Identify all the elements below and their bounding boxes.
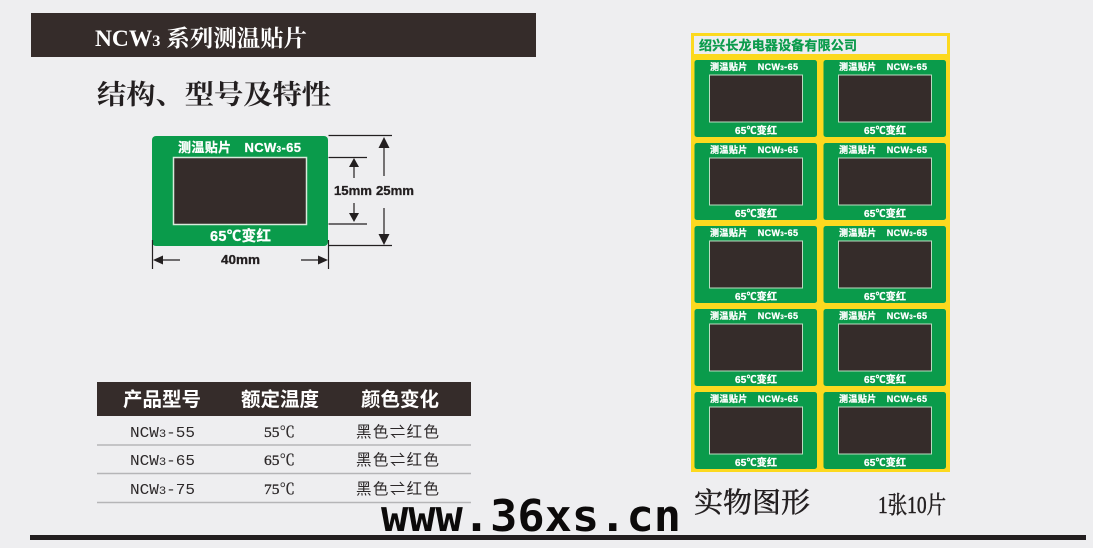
sticker 10: 65℃变红 — [864, 456, 906, 469]
row NCW3-75 — [130, 480, 439, 499]
sticker 5: 测温贴片 NCW3-65 — [710, 227, 798, 238]
company name box: 绍兴长龙电器设备有限公司 — [699, 38, 857, 53]
caption: actual product: 实物图形 — [694, 487, 810, 519]
section heading: 结构、型号及特性 — [97, 79, 331, 110]
table header: 产品型号 — [123, 389, 201, 411]
sticker body — [152, 136, 328, 246]
row NCW3-65 — [130, 451, 439, 470]
row NCW3-65: 黑色⇌红色 — [356, 451, 439, 469]
sticker 10 — [824, 392, 946, 469]
bottom rule — [30, 535, 1086, 540]
sticker 1: 测温贴片 NCW3-65 — [710, 61, 798, 72]
row NCW3-75: 75℃ — [264, 482, 295, 498]
sticker 7: 测温贴片 NCW3-65 — [710, 310, 798, 321]
sticker 2: 65℃变红 — [864, 124, 906, 137]
sticker 6: 测温贴片 NCW3-65 — [839, 227, 927, 238]
dimension label: 40mm: 40mm — [221, 253, 260, 267]
sticker 8 — [824, 309, 946, 386]
table header: 颜色变化 — [361, 388, 439, 411]
table header: 额定温度 — [241, 388, 319, 411]
sticker 7: 65℃变红 — [735, 373, 777, 386]
sticker 6 — [824, 226, 946, 303]
sticker 9: 测温贴片 NCW3-65 — [710, 393, 798, 404]
row NCW3-55: 黑色⇌红色 — [356, 423, 439, 441]
sticker 2: 测温贴片 NCW3-65 — [839, 61, 927, 72]
sticker 10: 测温贴片 NCW3-65 — [839, 393, 927, 404]
row NCW3-55: NCW3-55 — [130, 426, 195, 442]
sticker 8: 测温贴片 NCW3-65 — [839, 310, 927, 321]
product sheet panel — [691, 33, 950, 472]
sticker 3: 测温贴片 NCW3-65 — [710, 144, 798, 155]
header banner — [31, 13, 536, 57]
sticker 5 — [694, 226, 817, 303]
sticker 9: 65℃变红 — [735, 456, 777, 469]
specification table — [97, 382, 471, 502]
sticker 1: 65℃变红 — [735, 124, 777, 137]
sticker 4: 65℃变红 — [864, 207, 906, 220]
sticker 2 — [824, 60, 946, 137]
sticker 4 — [824, 143, 946, 220]
table header — [97, 382, 471, 416]
banner title: NCW3 系列测温贴片 — [95, 26, 307, 51]
sticker 1 — [694, 60, 817, 137]
caption: quantity: 1张10片 — [878, 492, 946, 519]
row NCW3-65: NCW3-65 — [130, 454, 195, 470]
sticker 7 — [694, 309, 817, 386]
row NCW3-75: 黑色⇌红色 — [356, 480, 439, 498]
sticker 4: 测温贴片 NCW3-65 — [839, 144, 927, 155]
sticker 9 — [694, 392, 817, 469]
row NCW3-55: 55℃ — [264, 425, 295, 441]
dimension lines — [152, 136, 392, 269]
dimension label: 25mm: 25mm — [376, 184, 414, 198]
dimension arrowheads — [153, 137, 390, 264]
row NCW3-55 — [130, 423, 439, 442]
row NCW3-75: NCW3-75 — [130, 483, 195, 499]
watermark: www.36xs.cn — [381, 491, 681, 542]
row NCW3-65: 65℃ — [264, 453, 295, 469]
sticker body: 65℃变红 — [210, 227, 271, 245]
sticker 8: 65℃变红 — [864, 373, 906, 386]
sticker body: 测温贴片 NCW3-65 — [178, 140, 301, 155]
sticker 3 — [694, 143, 817, 220]
diagram: sticker with dimensions — [152, 136, 414, 269]
sticker 6: 65℃变红 — [864, 290, 906, 303]
company name box — [694, 36, 947, 54]
sticker 3: 65℃变红 — [735, 207, 777, 220]
dimension label: 15mm: 15mm — [334, 184, 372, 198]
sticker 5: 65℃变红 — [735, 290, 777, 303]
